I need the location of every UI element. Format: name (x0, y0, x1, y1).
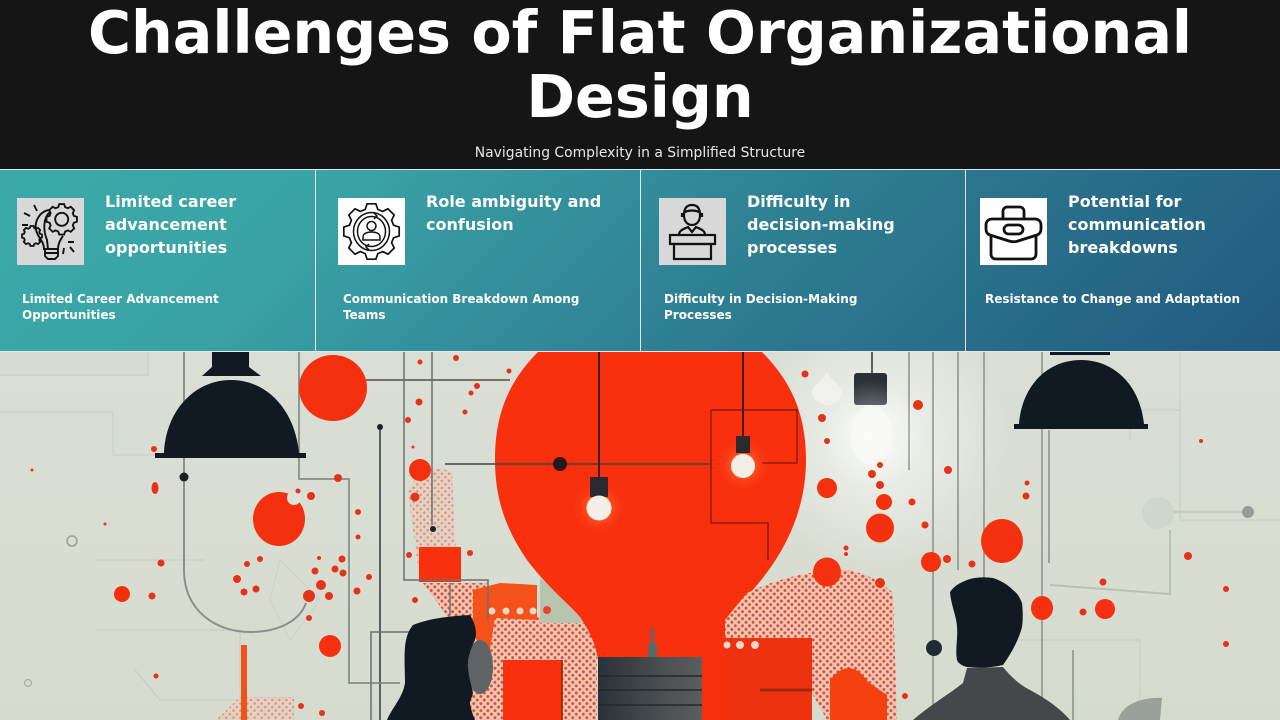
icon: briefcase (980, 198, 1047, 265)
card heading: Role ambiguity and confusion (426, 192, 601, 234)
halftone over bulb shoulder (725, 570, 897, 720)
faint circuit lines (0, 352, 1280, 720)
dark wiring (184, 352, 1073, 720)
pendant white drops (812, 352, 921, 490)
man silhouette (913, 577, 1070, 720)
title (88, 0, 1192, 131)
icon: gear with person (338, 198, 405, 265)
separator (640, 170, 641, 351)
orange and red blocks (419, 547, 887, 720)
grey wedge (1118, 698, 1162, 720)
title: Design (526, 63, 754, 131)
card description: Limited Career Advancement Opportunities (22, 292, 219, 322)
separator (965, 170, 966, 351)
subtitle: Navigating Complexity in a Simplified Structure (475, 145, 805, 161)
card description: Resistance to Change and Adaptation (985, 292, 1240, 306)
lamp left (155, 352, 306, 458)
card: decision making (659, 192, 895, 322)
card row (0, 169, 1280, 352)
icon: lightbulb with gears (17, 198, 84, 265)
bulb left (573, 477, 625, 534)
halftone fields (216, 469, 597, 720)
card description: Difficulty in Decision-Making Processes (664, 292, 857, 322)
title: Challenges of Flat Organizational (88, 0, 1192, 67)
thin orange post (241, 645, 247, 720)
illustration: lamps, red bulb and two people (0, 352, 1280, 720)
card heading: Potential for communication breakdowns (1068, 192, 1206, 257)
card description: Communication Breakdown Among Teams (343, 292, 579, 322)
icon: person at podium (659, 198, 726, 265)
separator (315, 170, 316, 351)
woman silhouette (387, 615, 493, 720)
bulb right (717, 436, 769, 491)
card: limited career advancement (17, 192, 236, 322)
red bulb shape (495, 352, 806, 720)
card: role ambiguity (338, 192, 601, 322)
card: communication breakdown (980, 192, 1240, 306)
red circles and splatter (30, 355, 1229, 716)
card heading: Limited career advancement opportunities (105, 192, 236, 257)
header band (0, 0, 1280, 169)
lamp right (1014, 352, 1148, 429)
drum (598, 628, 702, 720)
card heading: Difficulty in decision-making processes (747, 192, 895, 257)
